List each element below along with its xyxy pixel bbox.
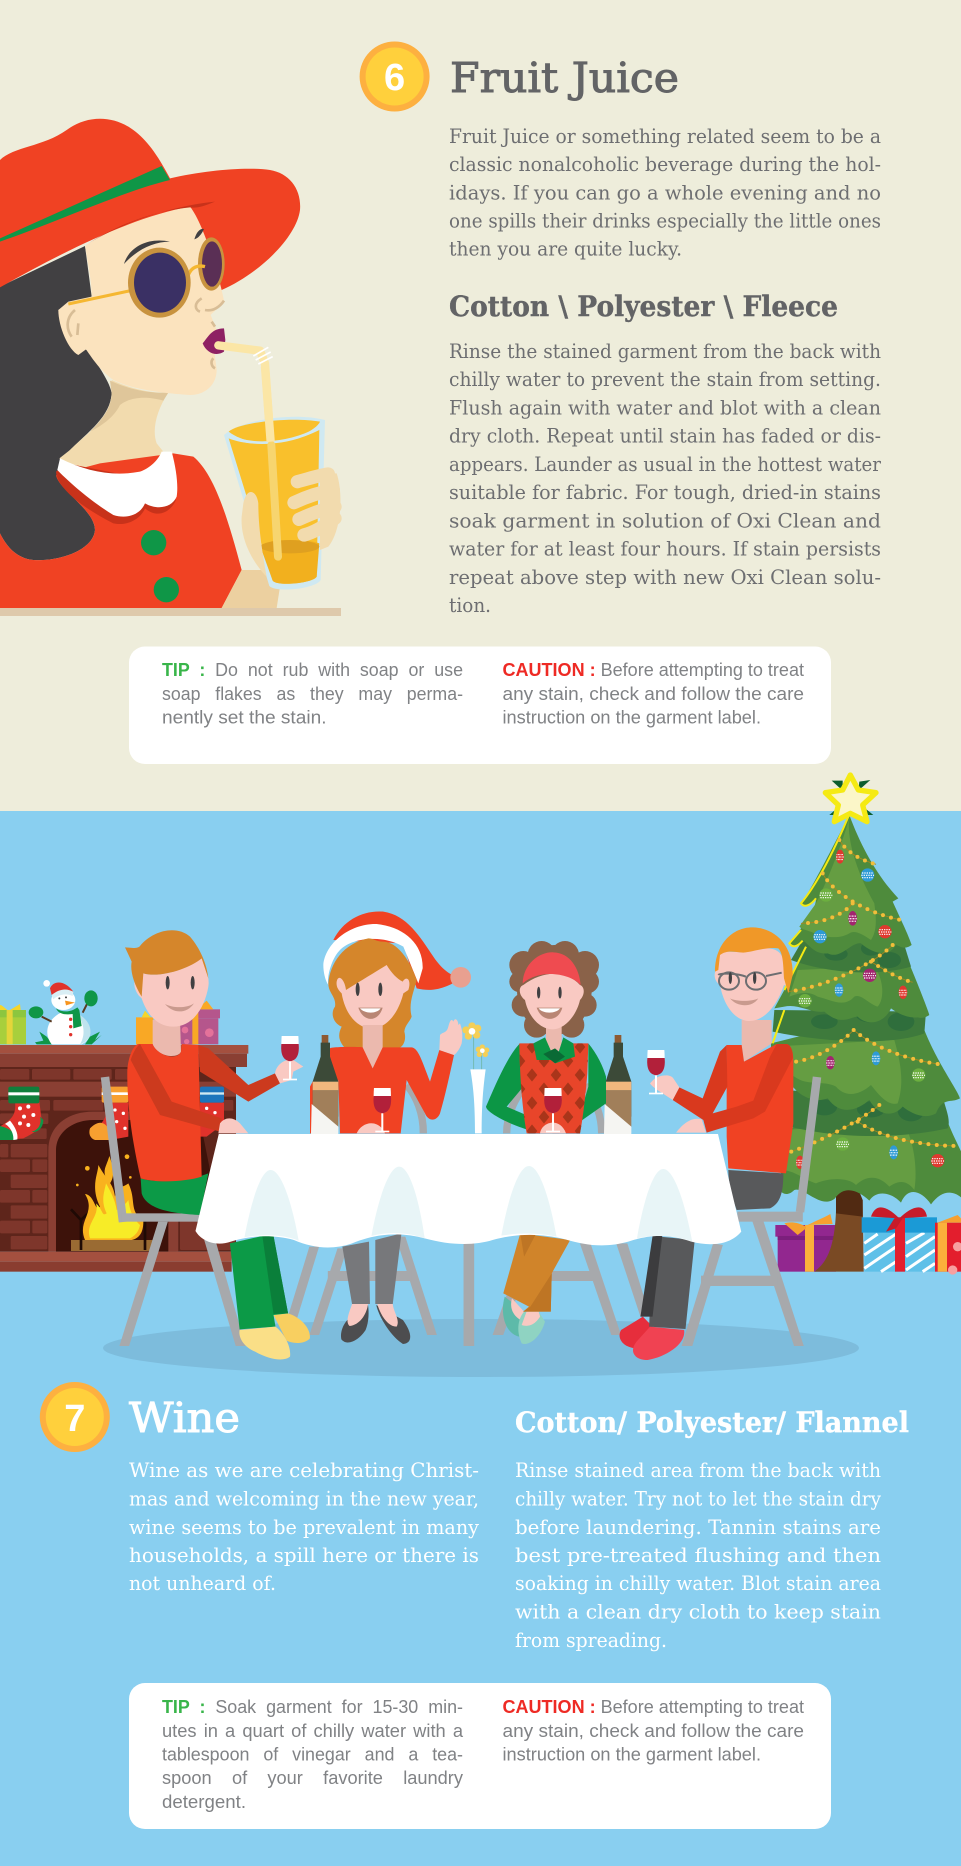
straw above rim (265, 367, 271, 442)
chair arcs behind guests (407, 1085, 602, 1133)
wine instructions paragraph: before laundering. Tannin stains are (515, 1516, 881, 1539)
eyes and smile (165, 976, 195, 1011)
thigh (141, 1173, 208, 1215)
table strip (0, 608, 341, 616)
mantel (0, 1045, 248, 1054)
hair (0, 246, 112, 560)
trunk shade (836, 1183, 863, 1217)
tip text: spoon of your favorite laundry (162, 1768, 463, 1788)
tip text: nently set the stain. (162, 708, 326, 728)
tier 1 shadow band (791, 940, 911, 972)
collar (57, 452, 177, 517)
face features (356, 983, 383, 1019)
wine instructions paragraph: from spreading. (515, 1629, 667, 1652)
tier 3 shadow band (778, 1090, 949, 1136)
hands (540, 1123, 566, 1133)
stocking right (200, 1087, 224, 1137)
person 2 (310, 911, 471, 1133)
hat (0, 119, 300, 290)
straw upper (218, 345, 271, 443)
instructions paragraph: chilly water to prevent the stain from setting. (449, 368, 881, 391)
neck (59, 380, 168, 473)
tree edge highlight (773, 817, 848, 1043)
rim line (227, 427, 322, 443)
person 1 (125, 930, 303, 1215)
caution text: any stain, check and follow the care (502, 1721, 804, 1741)
back thumb (242, 492, 267, 577)
shadow scallops (811, 1008, 914, 1031)
face features (537, 987, 562, 1019)
trunk (814, 1183, 864, 1272)
caution text: instruction on the garment label. (502, 708, 761, 728)
instructions paragraph: suitable for fabric. For tough, dried-in stains (449, 481, 881, 504)
caution text: instruction on the garment label. (502, 1745, 761, 1765)
tier 2 highlight (789, 967, 882, 1007)
shadow scallops (812, 1099, 924, 1121)
neck (546, 1027, 562, 1063)
tip text: tablespoon of vinegar and a tea- (162, 1745, 463, 1765)
wine glass 3 (544, 1088, 562, 1132)
stocking middle (89, 1087, 128, 1140)
wine glass 4 (647, 1050, 665, 1094)
santa hat (333, 911, 462, 990)
neck (742, 1020, 772, 1062)
wine glass 2 (373, 1088, 391, 1132)
person 2 legs (341, 1233, 410, 1344)
juice (229, 430, 319, 584)
tier 4 highlight (781, 1123, 916, 1190)
ear and nose details (68, 298, 224, 368)
tier 2 shadow band (773, 1010, 926, 1041)
sweater (727, 1044, 793, 1173)
collar shade (543, 1048, 565, 1063)
straw bend (253, 347, 273, 364)
sleeves (673, 1044, 793, 1133)
wine intro paragraph: Wine as we are celebrating Christ- (129, 1459, 479, 1482)
neck (363, 1025, 383, 1068)
shadow scallops (824, 941, 901, 968)
juice bottom shadow (261, 540, 319, 553)
persons 2 and 3 (310, 911, 631, 1138)
wine instructions paragraph: soaking in chilly water. Blot stain area (515, 1572, 881, 1595)
panel: tip and caution, fruit juice (129, 646, 831, 764)
hair (125, 930, 208, 997)
wine instructions paragraph (515, 1459, 881, 1652)
tip text: detergent. (162, 1792, 246, 1812)
tier 1 highlight (799, 818, 876, 940)
face (715, 948, 791, 1021)
title: Wine: Wine (129, 1394, 240, 1442)
gifts on mantel (136, 1001, 220, 1044)
intro paragraph: idays. If you can go a whole evening and no (449, 182, 881, 204)
arm (222, 570, 280, 608)
tip text: TIP : Do not rub with soap or use (162, 660, 463, 680)
tier 1 (789, 815, 912, 955)
wine intro paragraph: households, a spill here or there is (129, 1544, 479, 1567)
fireplace base (0, 1252, 232, 1262)
dress (0, 453, 242, 608)
gift orange right (935, 1215, 961, 1275)
wine intro paragraph (129, 1459, 479, 1595)
number badge 6 (360, 42, 430, 112)
Christmas tree (771, 775, 961, 1275)
top (310, 1047, 454, 1133)
tier 3 (771, 1023, 960, 1116)
section background: blue (0, 811, 961, 1866)
pants (728, 1170, 783, 1210)
collar shadow (56, 463, 176, 524)
wine glass 1 (281, 1036, 299, 1080)
illustration: woman with hat drinking juice (0, 119, 341, 616)
fireplace scene (0, 980, 248, 1272)
face features (729, 972, 758, 1005)
instructions paragraph: repeat above step with new Oxi Clean solu- (449, 566, 881, 589)
glasses (718, 972, 782, 990)
hands (650, 1075, 706, 1133)
wine intro paragraph: not unheard of. (129, 1572, 276, 1595)
hand on table (357, 1123, 385, 1133)
section background: cream (0, 0, 961, 811)
tier 3 highlight (771, 1040, 901, 1104)
tip text: soap flakes as they may perma- (162, 684, 463, 704)
tree star (825, 775, 876, 822)
table cloth (195, 1134, 741, 1247)
person 1 legs (230, 1236, 310, 1359)
hair (509, 941, 599, 1038)
tier 2 (774, 937, 929, 1022)
fire (71, 1154, 154, 1251)
number badge 7: 7 (64, 1398, 85, 1440)
person 4 legs (620, 1236, 695, 1360)
wine bottle left (311, 1035, 338, 1138)
gift blue striped (862, 1207, 937, 1272)
hat trim (323, 924, 423, 985)
ornaments (796, 850, 944, 1169)
tip text (162, 1697, 464, 1812)
instructions paragraph: soak garment in solution of Oxi Clean and (449, 510, 881, 532)
hair (715, 927, 793, 993)
lips (203, 328, 225, 354)
fireplace pillar (168, 1220, 178, 1252)
eyebrows (124, 229, 204, 264)
wine instructions paragraph: Rinse stained area from the back with (515, 1459, 881, 1482)
hat pompom (450, 967, 471, 988)
heading: Cotton Polyester Flannel: Cotton/ Polyester/ Flannel (515, 1406, 909, 1439)
tip text: TIP : Soak garment for 15-30 min- (162, 1697, 463, 1717)
intro paragraph: Fruit Juice or something related seem to be a (449, 125, 881, 148)
juice bottom (261, 540, 319, 584)
caution text (502, 1697, 804, 1765)
shirt collar (533, 1037, 575, 1063)
fingers (294, 474, 335, 535)
number badge 6: 6 (384, 57, 405, 99)
instructions paragraph: Flush again with water and blot with a clean (449, 396, 881, 420)
intro paragraph: one spills their drinks especially the little ones (449, 210, 881, 232)
face (58, 207, 224, 395)
headband (523, 952, 581, 985)
caution text (502, 660, 804, 728)
juice top (229, 420, 320, 443)
person 3 (486, 941, 606, 1133)
caution text: any stain, check and follow the care (502, 684, 804, 704)
chair backs (105, 1077, 817, 1222)
chairs and table leg (105, 1077, 817, 1346)
person 4 (650, 927, 793, 1210)
wine instructions paragraph: best pre-treated flushing and then (515, 1544, 881, 1567)
instructions paragraph: appears. Launder as usual in the hottest water (449, 453, 882, 476)
wine intro paragraph: wine seems to be prevalent in many (129, 1516, 479, 1539)
wine instructions paragraph: with a clean dry cloth to keep stain (515, 1600, 881, 1624)
table cloth folds (244, 1166, 692, 1242)
intro paragraph: then you are quite lucky. (449, 238, 682, 261)
tip text: utes in a quart of chilly water with a (162, 1721, 464, 1741)
dress buttons (141, 530, 179, 602)
person 3 legs (503, 1233, 570, 1344)
instructions paragraph: water for at least four hours. If stain persists (449, 538, 881, 561)
hat band (0, 166, 170, 242)
waving hand (439, 1019, 462, 1055)
neck shadow (90, 381, 168, 432)
vest (519, 1043, 588, 1133)
title: Fruit Juice: Fruit Juice (450, 54, 679, 102)
wine instructions paragraph: chilly water. Try not to let the stain dry (515, 1488, 881, 1510)
tip text (162, 660, 463, 728)
hair (328, 938, 417, 1048)
caution text: CAUTION : Before attempting to treat (502, 660, 804, 680)
instructions paragraph (449, 340, 882, 617)
vest diamonds (519, 1043, 588, 1133)
garlands (788, 840, 956, 1152)
gift on mantel left (0, 1004, 26, 1044)
face (520, 974, 584, 1029)
face (337, 965, 409, 1028)
instructions paragraph: dry cloth. Repeat until stain has faded or dis- (449, 425, 881, 448)
fireplace body (0, 1045, 248, 1272)
sleeves (486, 1043, 606, 1133)
heading: Cotton Polyester Fleece: Cotton \ Polyester \ Fleece (449, 290, 838, 323)
snowman (29, 980, 102, 1044)
wine bottle right (604, 1035, 631, 1138)
chair legs (119, 1212, 804, 1346)
number badge 7 (40, 1382, 110, 1452)
gift purple (775, 1214, 836, 1272)
panel: tip and caution, wine (129, 1683, 831, 1829)
arch (48, 1112, 177, 1252)
intro paragraph: classic nonalcoholic beverage during the hol- (449, 153, 881, 176)
straw in juice (271, 445, 278, 557)
caution text: CAUTION : Before attempting to treat (502, 1697, 804, 1717)
instructions paragraph: Rinse the stained garment from the back with (449, 340, 881, 363)
stocking left (0, 1087, 43, 1140)
firebox (56, 1120, 220, 1252)
legs and table (195, 1134, 741, 1360)
hands (218, 1060, 303, 1133)
neck (153, 1020, 181, 1056)
intro paragraph (449, 125, 881, 261)
hat brim shadow (83, 202, 215, 247)
floor shadow (103, 1319, 859, 1377)
sleeve (131, 1044, 222, 1132)
tier 4 (781, 1098, 961, 1204)
flower vase (462, 1022, 489, 1133)
glass (224, 417, 325, 590)
sweater (127, 1044, 202, 1181)
face (134, 957, 209, 1027)
instructions paragraph: tion. (449, 594, 491, 617)
palm (320, 473, 340, 550)
sunglasses (68, 237, 225, 318)
raised arm (198, 1045, 280, 1102)
wine intro paragraph: mas and welcoming in the new year, (129, 1488, 479, 1510)
